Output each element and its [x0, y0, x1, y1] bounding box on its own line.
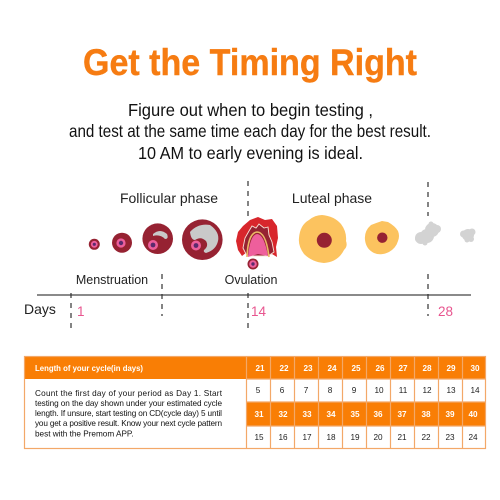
table row: start days 15-24 [254, 433, 478, 442]
icon: released egg [248, 258, 258, 270]
icon: follicle 1 [89, 239, 100, 250]
table: cycle length [24, 356, 486, 449]
day markers: 14 [251, 304, 267, 319]
table row: start days 15-24: 20 [373, 433, 383, 442]
phase label: luteal: Luteal phase [292, 190, 372, 206]
label: days: Days [24, 301, 56, 317]
table row: start days 5-14: 8 [328, 386, 333, 395]
table row: cycle lengths 21-30: 29 [446, 364, 456, 373]
table row: cycle lengths 31-40: 40 [468, 410, 478, 419]
table row: cycle lengths 21-30: 23 [303, 364, 313, 373]
table row: start days 5-14: 5 [256, 386, 261, 395]
table row: cycle lengths 31-40: 31 [254, 410, 264, 419]
table row: start days 5-14: 7 [304, 386, 309, 395]
label: menstruation: Menstruation [76, 273, 148, 287]
table row: cycle lengths 31-40: 39 [445, 410, 455, 419]
day markers [77, 304, 453, 319]
table row: start days 15-24: 19 [350, 433, 360, 442]
table row: cycle lengths 31-40: 34 [326, 410, 336, 419]
table header label: Length of your cycle(in days) [35, 364, 143, 373]
table row: start days 15-24: 23 [445, 433, 455, 442]
table row: start days 5-14: 14 [470, 386, 480, 395]
table row: start days 5-14: 9 [352, 386, 357, 395]
icon: corpus albicans large [415, 222, 441, 246]
instructions text: length. If unsure, start testing on CD(cycle day) 5 until [35, 409, 222, 418]
table row: start days 15-24: 15 [254, 433, 264, 442]
instructions text: best with the Premom APP. [35, 430, 134, 438]
table row: cycle lengths 21-30: 27 [398, 364, 408, 373]
icon: corpus albicans small [460, 228, 476, 242]
table row: start days 15-24: 21 [397, 433, 407, 442]
table row: cycle lengths 31-40: 37 [397, 410, 407, 419]
table row: start days 5-14: 10 [374, 386, 384, 395]
table row: cycle lengths 31-40: 38 [421, 410, 431, 419]
table row: start days 15-24: 18 [326, 433, 336, 442]
intro text: Figure out when to begin testing , [128, 100, 373, 120]
table row: cycle lengths 31-40: 32 [278, 410, 288, 419]
label: ovulation: Ovulation [225, 273, 277, 287]
icon: corpus luteum small [365, 221, 399, 254]
icon: ovulation follicle [236, 217, 278, 257]
table row: cycle lengths 31-40: 35 [350, 410, 360, 419]
icon: corpus luteum large [299, 215, 347, 263]
table row: cycle lengths 31-40: 36 [373, 410, 383, 419]
table row: start days 5-14: 11 [399, 386, 408, 395]
table row: start days 15-24: 22 [421, 433, 431, 442]
phase label: follicular: Follicular phase [120, 190, 218, 206]
icon: follicle 4 [182, 219, 223, 260]
icon: follicle 3 [142, 223, 173, 254]
icon: follicle 2 [112, 233, 132, 253]
instructions text: testing on the day shown under your estimated cycle [35, 399, 222, 408]
day markers: 28 [438, 304, 453, 319]
instructions text: you get a positive result. Know your next cycle pattern [35, 419, 222, 428]
table row: cycle lengths 31-40: 33 [302, 410, 312, 419]
table row: start days 15-24: 16 [278, 433, 288, 442]
table row: cycle lengths 21-30: 21 [255, 364, 265, 373]
table row: start days 5-14: 12 [422, 386, 432, 395]
intro text: and test at the same time each day for the best result. [69, 121, 431, 141]
table row: cycle lengths 21-30: 30 [470, 364, 480, 373]
table row: cycle lengths 21-30: 28 [422, 364, 432, 373]
intro text [69, 100, 431, 163]
table row: start days 5-14 [256, 386, 480, 395]
timeline axis [37, 294, 471, 296]
table row: cycle lengths 21-30: 24 [327, 364, 337, 373]
table row: cycle lengths 31-40 [254, 410, 478, 419]
table row: start days 5-14: 6 [280, 386, 285, 395]
table row: start days 5-14: 13 [446, 386, 456, 395]
table row: start days 15-24: 24 [468, 433, 478, 442]
instructions text [35, 389, 223, 438]
table row: cycle lengths 21-30 [255, 364, 480, 373]
title: Get the Timing Right [83, 42, 417, 83]
table row: cycle lengths 21-30: 22 [279, 364, 289, 373]
table row: cycle lengths 21-30: 25 [351, 364, 361, 373]
intro text: 10 AM to early evening is ideal. [138, 143, 363, 163]
table row: start days 15-24: 17 [302, 433, 312, 442]
instructions text: Count the first day of your period as Day 1. Start [35, 389, 223, 398]
day markers: 1 [77, 304, 85, 319]
table row: cycle lengths 21-30: 26 [375, 364, 385, 373]
